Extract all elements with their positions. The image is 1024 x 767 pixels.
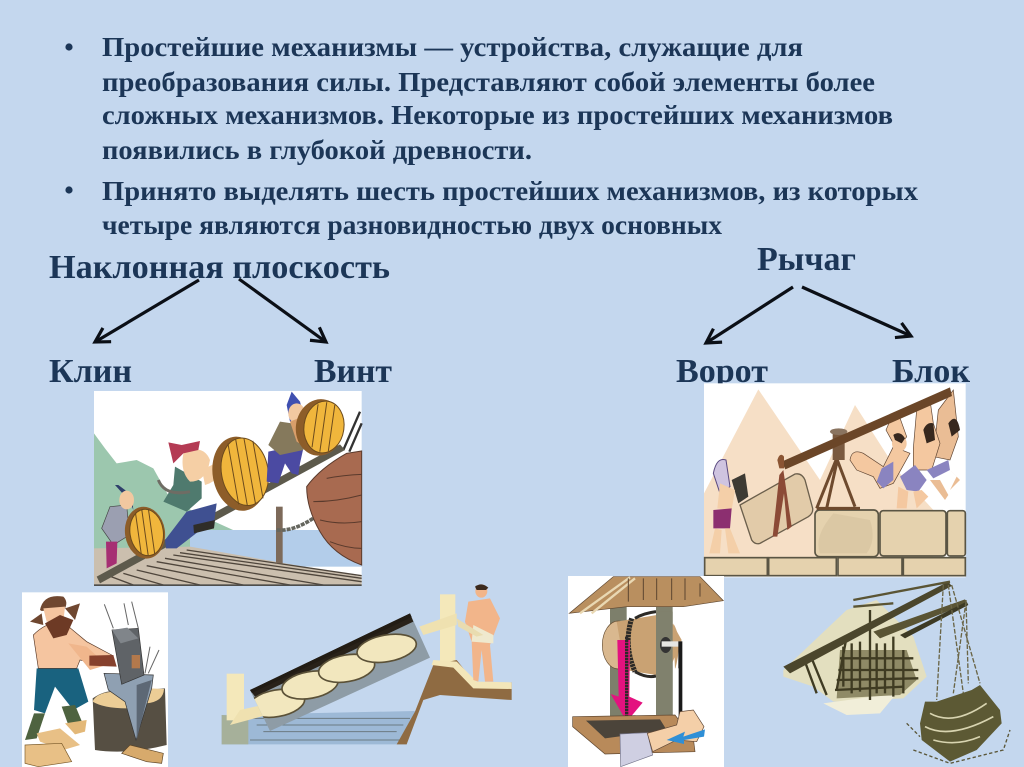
roof	[569, 577, 723, 613]
beam	[782, 387, 952, 469]
label: wedge: Клин	[49, 353, 132, 390]
blocks	[705, 510, 965, 576]
water basin	[222, 711, 415, 744]
label: pulley: Блок	[892, 353, 970, 390]
paragraph 2: четыре являются разновидностью двух основных	[102, 209, 722, 240]
drum	[602, 621, 634, 669]
heading: inclined plane: Наклонная плоскость	[49, 249, 390, 286]
worker middle	[165, 503, 217, 548]
paragraph 1: появились в глубокой древности.	[102, 134, 532, 165]
arm	[620, 733, 653, 767]
posts	[610, 600, 627, 723]
hill	[397, 660, 512, 744]
wedge	[104, 673, 153, 740]
label: screw: Винт	[314, 353, 392, 390]
torso	[33, 623, 112, 668]
chips	[37, 728, 80, 750]
arrow: lever to windlass	[706, 287, 793, 343]
ramp	[97, 444, 345, 583]
pink arrow	[611, 640, 643, 722]
paragraph 2: Принято выделять шесть простейших механизмов, из которых	[102, 175, 918, 206]
head	[40, 596, 66, 611]
paragraph 1: Простейшие механизмы — устройства, служащие для	[102, 31, 803, 62]
label: windlass: Ворот	[676, 353, 768, 390]
paragraph 1: преобразования силы. Представляют собой элементы более	[102, 66, 875, 97]
booms	[783, 582, 952, 673]
crane body	[783, 600, 927, 702]
illustration: barrels rolled up a ramp	[94, 391, 362, 586]
barrel top	[292, 396, 348, 459]
posts	[227, 674, 244, 720]
arrow: inclined plane to wedge	[95, 280, 199, 342]
paragraph 1	[102, 31, 893, 165]
illustration: lever lifting a stone block	[704, 383, 966, 577]
screw	[250, 614, 430, 731]
paragraph 2	[102, 175, 918, 240]
ropes	[937, 585, 980, 700]
basin	[573, 715, 695, 754]
barrel small	[122, 504, 168, 561]
worker top	[267, 448, 303, 483]
stone	[740, 474, 813, 544]
labourers	[850, 390, 960, 508]
paragraph 1: сложных механизмов. Некоторые из простейших механизмов	[102, 99, 893, 130]
illustration: well windlass	[568, 576, 724, 767]
ship	[920, 685, 1002, 762]
supervisor	[713, 459, 730, 493]
arrow: inclined plane to screw	[239, 279, 326, 342]
heading: lever: Рычаг	[757, 241, 856, 278]
worker back	[115, 485, 133, 510]
man legs	[34, 668, 88, 713]
crank	[660, 637, 671, 653]
illustration: ship-lifting claw	[783, 582, 1010, 763]
stump	[93, 688, 167, 752]
barrel big	[207, 432, 274, 515]
illustration: woodcutter splitting log with wedge	[22, 592, 168, 767]
man	[475, 584, 487, 598]
bullet marker 1	[65, 43, 73, 51]
text block: introduction bullets	[65, 31, 918, 240]
fulcrum	[817, 458, 860, 508]
hammer	[89, 655, 117, 667]
illustration: Archimedes screw	[222, 584, 512, 744]
bullet marker 2	[65, 186, 73, 194]
ship hull	[307, 451, 362, 565]
arrow: lever to pulley	[802, 287, 911, 336]
